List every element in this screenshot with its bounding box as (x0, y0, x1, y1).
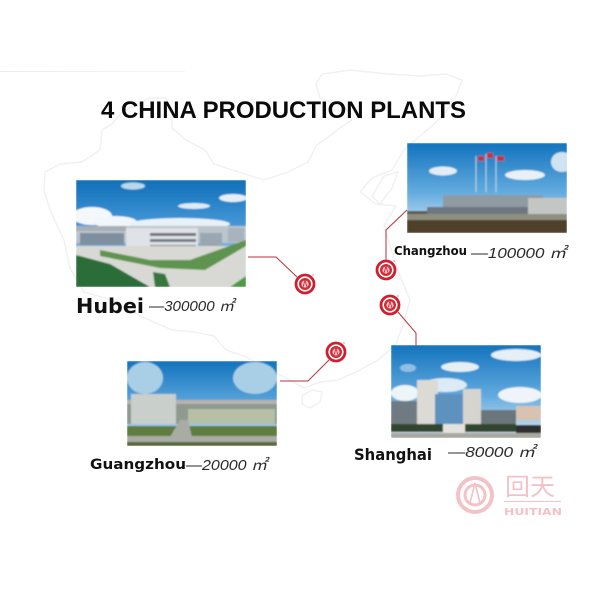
panel: Guangzhou photo (127, 361, 277, 446)
connector: Shanghai (398, 312, 416, 346)
Shanghai label: Shanghai (354, 445, 432, 464)
panel: Changzhou photo (407, 143, 573, 233)
Hubei label (76, 294, 237, 318)
Changzhou label: Changzhou (394, 244, 467, 258)
Changzhou label: —100000 ㎡ (470, 244, 569, 262)
panel: Hubei photo (72, 180, 247, 287)
Hubei label: Hubei (76, 294, 144, 318)
icon: Changzhou marker (377, 260, 395, 279)
Shanghai label (354, 443, 538, 464)
map outline of China (44, 70, 462, 408)
watermark logo: HUITIAN (504, 507, 562, 518)
top rule (0, 71, 185, 72)
title: 4 CHINA PRODUCTION PLANTS (101, 97, 466, 124)
Guangzhou label (90, 456, 270, 474)
Changzhou label (394, 244, 569, 262)
connector: Guangzhou (280, 360, 329, 381)
Hubei label: —300000 ㎡ (148, 297, 237, 315)
connector: Hubei (248, 257, 297, 277)
icon: Guangzhou marker (327, 342, 345, 361)
Guangzhou label: Guangzhou (90, 457, 186, 473)
icon: Hubei marker (296, 274, 314, 293)
watermark logo (458, 474, 562, 518)
connector: Changzhou (386, 210, 407, 260)
panel: Shanghai photo (391, 345, 542, 438)
icon: Shanghai marker (381, 295, 399, 314)
Guangzhou label: —20000 ㎡ (185, 456, 270, 474)
Shanghai label: —80000 ㎡ (447, 443, 538, 461)
watermark logo: 回天 (505, 474, 555, 501)
